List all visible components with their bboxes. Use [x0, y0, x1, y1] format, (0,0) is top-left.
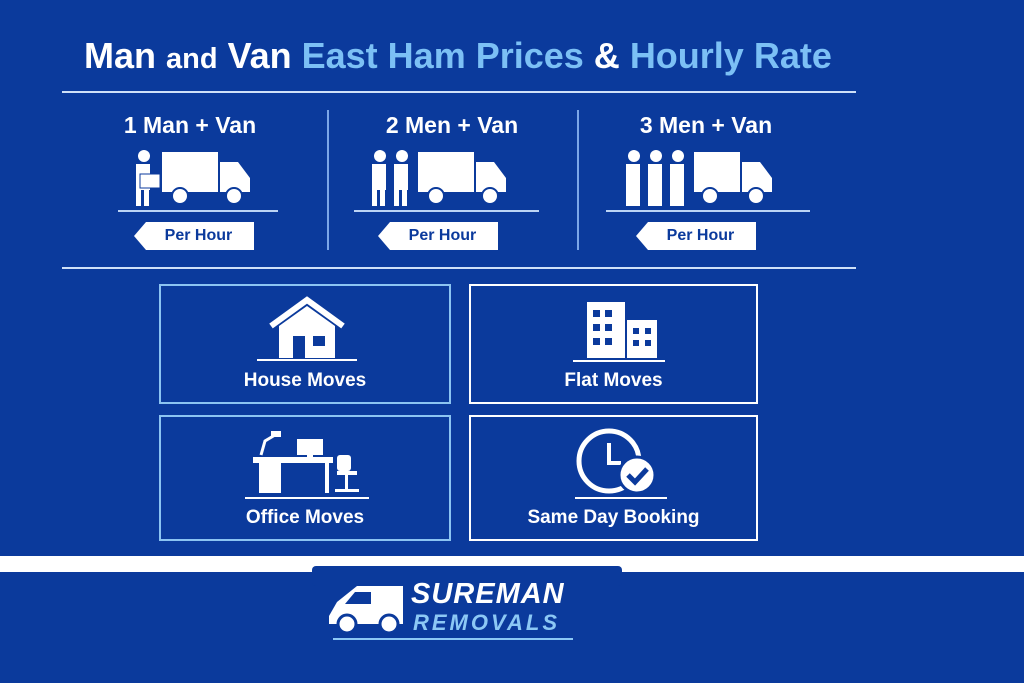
icon: desk	[245, 431, 369, 499]
footer band	[0, 556, 1024, 572]
panel: office moves	[159, 415, 451, 541]
icon: van with three men	[626, 150, 772, 206]
logo	[329, 578, 573, 640]
panel: 3 men + van	[606, 112, 810, 250]
price tag: Per Hour	[409, 227, 476, 244]
logo: REMOVALS	[413, 610, 560, 635]
icon: house	[257, 296, 357, 361]
panel: house moves: House Moves	[244, 370, 366, 391]
panel: same day booking: Same Day Booking	[527, 507, 700, 528]
price tag	[636, 222, 756, 250]
icon: buildings	[573, 302, 665, 362]
logo: SUREMAN	[411, 578, 565, 610]
price tag	[378, 222, 498, 250]
title: Man and Van East Ham Prices & Hourly Rate	[84, 35, 832, 76]
icon: van with man	[136, 150, 250, 206]
panel: 2 men + van	[354, 112, 539, 250]
price tag	[134, 222, 254, 250]
panel: house moves	[159, 284, 451, 404]
panel: office moves: Office Moves	[246, 507, 364, 528]
panel: flat moves: Flat Moves	[564, 370, 663, 391]
price tag: Per Hour	[667, 227, 734, 244]
panel: flat moves	[469, 284, 758, 404]
panel: 1 man + van	[118, 112, 278, 250]
icon: van with two men	[372, 150, 506, 206]
panel: 2 men + van: 2 Men + Van	[386, 112, 518, 138]
icon: clock with check	[575, 428, 667, 499]
panel: same day booking	[469, 415, 758, 541]
price tag: Per Hour	[165, 227, 232, 244]
panel: 3 men + van: 3 Men + Van	[640, 112, 772, 138]
icon: van logo	[329, 586, 403, 632]
panel: 1 man + van: 1 Man + Van	[124, 112, 256, 138]
